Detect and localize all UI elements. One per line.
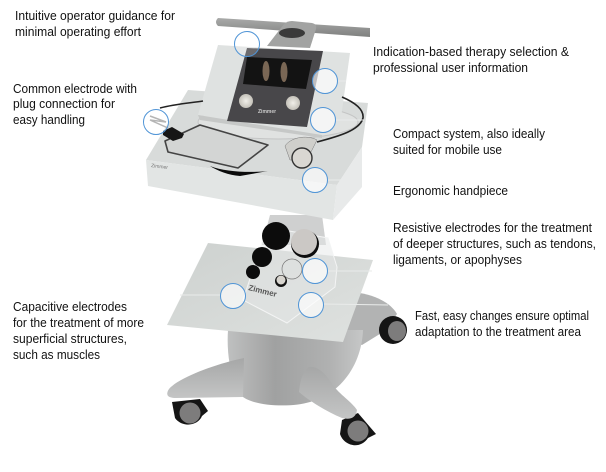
label: resistive electrodes: ligaments, or apophyses	[393, 252, 522, 267]
label: compact system	[393, 126, 545, 157]
rotary base ring	[198, 105, 358, 139]
label: compact system: suited for mobile use	[393, 142, 502, 157]
label: operator guidance: Intuitive operator guidance for	[15, 8, 176, 23]
label: capacitive electrodes: Capacitive electrodes	[13, 299, 127, 314]
upper glass box: Zimmer	[151, 163, 169, 171]
label: therapy selection	[373, 44, 569, 75]
knobs	[239, 94, 253, 108]
label: common electrode	[13, 81, 137, 127]
lower glass shelf	[167, 243, 373, 342]
electrode holder tray: Zimmer	[248, 283, 278, 299]
front left caster	[172, 399, 208, 425]
upper glass box	[146, 90, 368, 220]
label: operator guidance: minimal operating effort	[15, 24, 141, 39]
handle bar	[216, 18, 370, 48]
label: therapy selection: Indication-based therapy selection &	[373, 44, 569, 59]
label: ergonomic handpiece: Ergonomic handpiece	[393, 183, 508, 198]
common electrode plate and connector	[150, 116, 268, 168]
label: fast changes: adaptation to the treatment area	[415, 324, 582, 339]
label: resistive electrodes	[393, 220, 596, 267]
label: capacitive electrodes: superficial structures,	[13, 331, 127, 346]
label: fast changes	[415, 308, 589, 339]
support column	[262, 215, 326, 245]
label: common electrode: easy handling	[13, 112, 85, 127]
front right caster	[340, 413, 376, 445]
handpiece	[285, 137, 317, 168]
pedestal body	[167, 330, 363, 419]
control unit	[198, 45, 350, 138]
electrode holder tray	[243, 222, 337, 323]
label: resistive electrodes: Resistive electrodes for the treatment	[393, 220, 592, 235]
label: common electrode: Common electrode with	[13, 81, 137, 96]
leader lines	[180, 81, 388, 305]
label: capacitive electrodes: for the treatment of more	[13, 315, 144, 330]
electrode cable	[160, 97, 363, 142]
label: compact system: Compact system, also ideally	[393, 126, 545, 141]
control unit: Zimmer	[258, 109, 276, 115]
body figures on screen	[262, 61, 288, 82]
label: capacitive electrodes: such as muscles	[13, 347, 100, 362]
label: therapy selection: professional user information	[373, 60, 528, 75]
label: operator guidance	[15, 8, 176, 39]
label: common electrode: plug connection for	[13, 96, 116, 111]
label: capacitive electrodes	[13, 299, 144, 362]
callout markers	[144, 32, 338, 318]
rear right leg with caster	[345, 292, 407, 345]
